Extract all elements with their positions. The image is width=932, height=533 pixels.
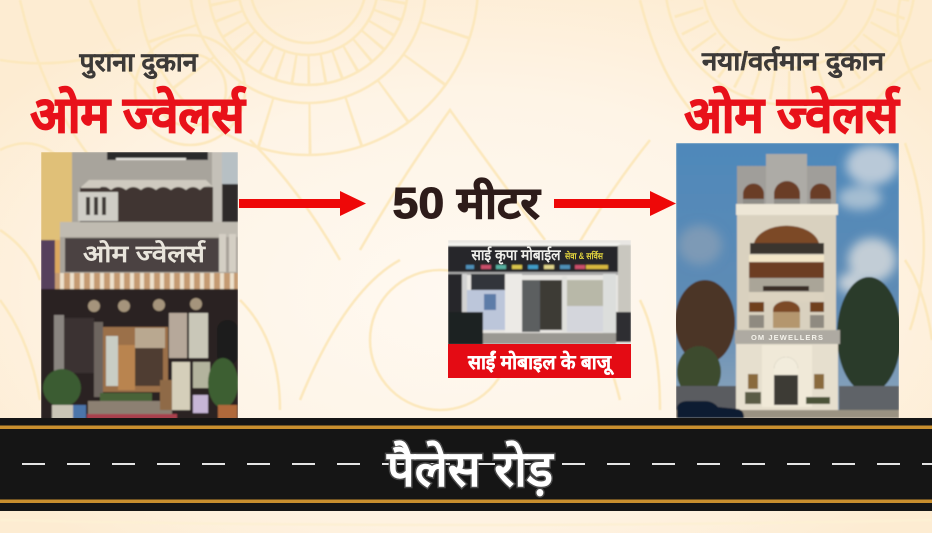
arrow: old shop to distance xyxy=(239,191,366,216)
caption text: साईं मोबाइल के बाजू xyxy=(467,350,615,375)
photo: new shop building render xyxy=(675,143,901,418)
road edge line bottom xyxy=(0,500,932,503)
red caption band xyxy=(448,344,631,378)
building sign text: OM JEWELLERS xyxy=(751,333,823,342)
heading: new shop name: ओम ज्वेलर्स xyxy=(684,86,901,143)
photo: old shop xyxy=(41,152,238,422)
photo: neighbouring mobile shop xyxy=(448,240,631,378)
road edge line top xyxy=(0,426,932,429)
road xyxy=(0,418,932,511)
distance label: 50 मीटर xyxy=(392,177,542,228)
mobile shop sign text: साई कृपा मोबाईल xyxy=(471,246,561,265)
mobile shop sign sub text: सेवा & सर्विस xyxy=(564,250,604,261)
heading: old shop name: ओम ज्वेलर्स xyxy=(30,86,247,143)
heading: old shop label: पुराना दुकान xyxy=(78,47,199,79)
road centre dashes xyxy=(22,463,932,465)
arrow: distance to new shop xyxy=(554,191,676,216)
shop sign text: ओम ज्वेलर्स xyxy=(83,240,206,268)
heading: new shop label: नया/वर्तमान दुकान xyxy=(701,46,886,78)
road name: पैलेस रोड़ xyxy=(386,440,555,497)
